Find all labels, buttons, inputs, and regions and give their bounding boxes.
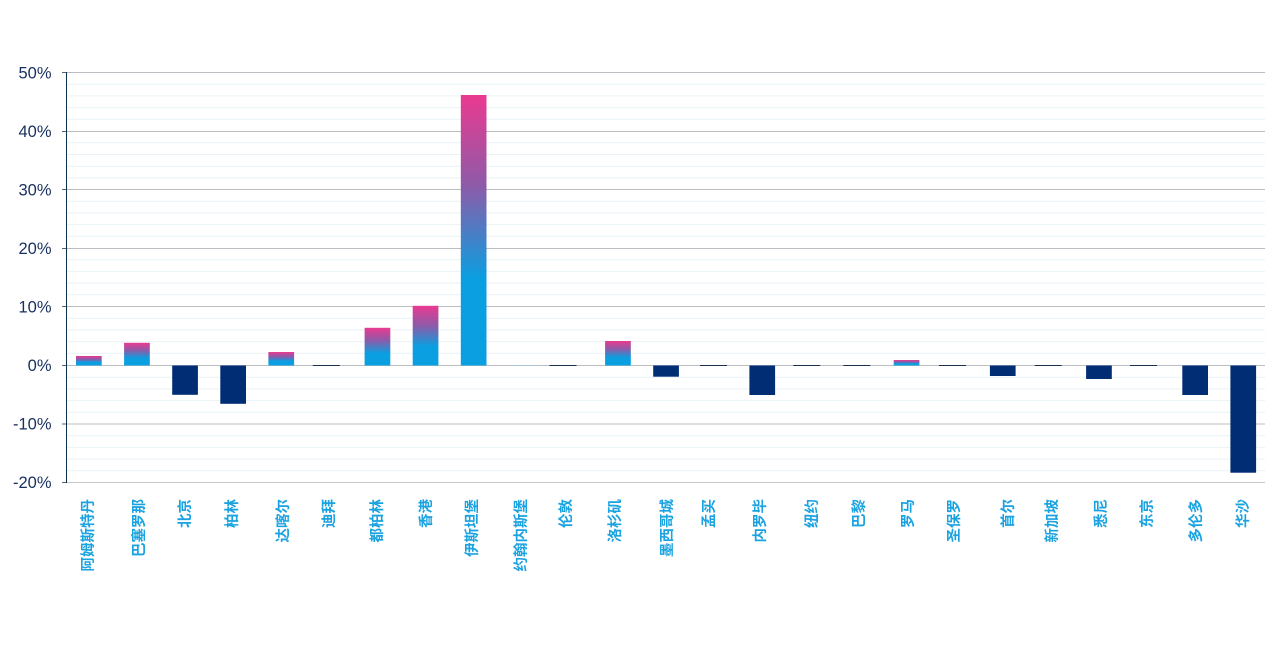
bar: 巴塞罗那 xyxy=(124,343,150,366)
x axis city labels: 伊斯坦堡 xyxy=(463,499,481,557)
x axis city labels: 达喀尔 xyxy=(274,499,292,542)
bar: 圣保罗 xyxy=(939,365,966,366)
bars xyxy=(76,95,1256,473)
bar: 阿姆斯特丹 xyxy=(76,356,102,366)
y axis line and ticks xyxy=(62,72,66,483)
bar: 达喀尔 xyxy=(268,352,294,366)
x axis city labels: 香港 xyxy=(417,499,435,528)
x axis city labels xyxy=(79,499,1252,572)
bar: 洛杉矶 xyxy=(605,341,631,366)
bar: 东京 xyxy=(1130,365,1157,366)
x axis city labels: 内罗毕 xyxy=(752,499,769,542)
x axis city labels: 纽约 xyxy=(803,499,821,528)
x axis city labels: 北京 xyxy=(176,499,194,528)
x axis city labels: 墨西哥城 xyxy=(658,499,676,557)
x axis city labels: 洛杉矶 xyxy=(607,499,624,542)
x axis city labels: 阿姆斯特丹 xyxy=(79,499,97,572)
bar: 巴黎 xyxy=(843,365,870,366)
y axis labels xyxy=(13,64,52,492)
y axis labels: 30% xyxy=(18,182,52,200)
bar: 北京 xyxy=(172,366,198,395)
bar: 首尔 xyxy=(990,366,1016,376)
bar: 迪拜 xyxy=(313,365,340,366)
bar: 香港 xyxy=(413,306,438,366)
bar: 孟买 xyxy=(700,365,727,366)
bar: 华沙 xyxy=(1230,366,1256,473)
x axis city labels: 巴黎 xyxy=(851,499,868,528)
x axis city labels: 东京 xyxy=(1138,499,1156,528)
bar: 柏林 xyxy=(220,366,246,404)
x axis city labels: 圣保罗 xyxy=(946,499,963,542)
bar: 新加坡 xyxy=(1035,365,1062,366)
y axis labels: 40% xyxy=(18,123,52,141)
bar: 多伦多 xyxy=(1182,366,1208,395)
bar: 悉尼 xyxy=(1086,366,1112,379)
x axis city labels: 新加坡 xyxy=(1043,499,1061,542)
x axis city labels: 柏林 xyxy=(224,499,241,528)
x axis city labels: 巴塞罗那 xyxy=(130,499,148,557)
x axis city labels: 约翰内斯堡 xyxy=(512,499,530,572)
x axis city labels: 迪拜 xyxy=(321,499,338,528)
bar: 伦敦 xyxy=(550,365,576,366)
bar: 罗马 xyxy=(894,360,919,366)
bar: 墨西哥城 xyxy=(653,366,679,377)
bar: 纽约 xyxy=(793,365,820,366)
x axis city labels: 伦敦 xyxy=(557,499,575,528)
bar: 都柏林 xyxy=(365,328,390,366)
x axis city labels: 罗马 xyxy=(900,499,917,528)
x axis city labels: 孟买 xyxy=(701,499,718,528)
x axis city labels: 悉尼 xyxy=(1093,499,1110,528)
y axis labels: 20% xyxy=(18,240,52,258)
x axis city labels: 华沙 xyxy=(1234,499,1252,528)
y axis labels: -20% xyxy=(13,474,52,492)
y axis labels: 0% xyxy=(28,357,52,375)
y axis labels: 50% xyxy=(18,64,52,82)
x axis city labels: 多伦多 xyxy=(1187,499,1205,542)
x axis city labels: 首尔 xyxy=(999,499,1017,528)
x axis city labels: 都柏林 xyxy=(369,499,386,542)
y axis labels: -10% xyxy=(13,416,52,434)
y axis labels: 10% xyxy=(18,298,52,316)
bar: 内罗毕 xyxy=(749,366,775,395)
bar: 约翰内斯堡 xyxy=(509,365,535,366)
bar: 伊斯坦堡 xyxy=(461,95,486,366)
